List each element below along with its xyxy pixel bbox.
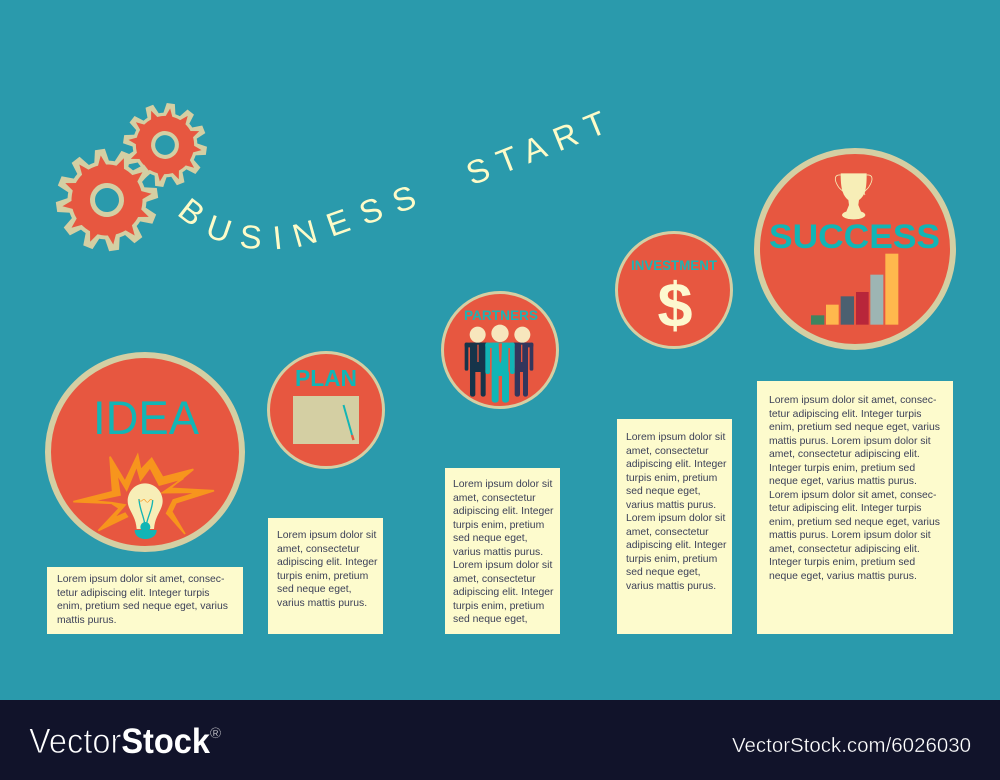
text block: success: tetur adipiscing elit. Integer turpis [769,503,921,514]
heading: partners: PARTNERS [464,307,538,323]
text block: success: amet, consectetur adipiscing elit. [769,449,920,460]
text block: investment: varius mattis purus. [626,500,716,510]
text block: partners: sed neque eget, [453,533,528,544]
title: business start: BUSINESS START [178,110,601,250]
text block: success: neque eget, varius mattis purus. [769,570,917,582]
text block: partners: Lorem ipsum dolor sit [453,479,552,490]
text block: investment [617,419,732,634]
text block: success: Integer turpis enim, pretium sed [769,557,915,568]
footer image id: VectorStock.com/6026030 [732,735,971,757]
text block: investment: adipiscing elit. Integer [626,459,727,470]
footer bar [0,700,1000,780]
text block: plan: varius mattis purus. [277,598,367,608]
text block: investment: amet, consectetur [626,446,709,456]
text block: partners: Lorem ipsum dolor sit [453,560,552,571]
heading: plan: PLAN [295,365,357,391]
icon: small gear [118,98,212,192]
text block: plan: adipiscing elit. Integer [277,557,378,568]
text block: investment: sed neque eget, [626,567,701,578]
panel: partners circle [442,292,558,408]
text block: success: amet, consectetur adipiscing elit. [769,544,920,554]
text block: plan: turpis enim, pretium [277,570,368,582]
text block: partners: varius mattis purus. [453,546,543,558]
panel: investment circle [616,232,732,348]
text block: success [757,381,953,634]
text block: partners: adipiscing elit. Integer [453,506,554,517]
footer logo: VectorStock [29,722,210,761]
text block: success: Lorem ipsum dolor sit amet, consec- [769,395,936,406]
text block: partners: turpis enim, pretium [453,600,544,612]
text block: plan [268,518,383,634]
text block: partners: amet, consectetur [453,574,536,584]
text block: success: enim, pretium sed neque eget, varius [769,422,940,433]
text block: investment: turpis enim, pretium [626,472,717,484]
text block: plan: Lorem ipsum dolor sit [277,530,376,541]
text block: success: Lorem ipsum dolor sit amet, consec- [769,490,936,500]
footer registered mark: ® [210,725,221,742]
text block: success: Integer turpis enim, pretium sed [769,462,915,474]
text block: investment: Lorem ipsum dolor sit [626,432,725,443]
bar chart [811,254,898,325]
text block: plan: amet, consectetur [277,544,360,554]
text block: idea: mattis purus. [57,614,116,626]
heading: idea: IDEA [93,391,200,444]
panel: plan circle [268,352,384,468]
icon: large gear [49,142,165,258]
heading: success: SUCCESS [769,218,940,256]
text block: idea [47,567,243,634]
text block: partners [445,468,560,634]
icon: burst [73,455,214,534]
text block: investment: Lorem ipsum dolor sit [626,513,725,524]
text block: idea: tetur adipiscing elit. Integer turpis [57,588,209,598]
icon: three business people [465,325,533,403]
panel: idea circle [48,355,242,549]
panel: success circle [757,151,953,347]
icon: pencil [344,405,354,440]
text block: success: mattis purus. Lorem ipsum dolor sit [769,530,931,541]
text block: investment: varius mattis purus. [626,580,716,592]
icon: paper [293,396,359,444]
text block: idea: Lorem ipsum dolor sit amet, consec- [57,574,224,585]
text block: success: neque eget, varius mattis purus. [769,476,917,487]
heading: investment: INVESTMENT [631,257,717,273]
text block: plan: sed neque eget, [277,584,352,595]
icon: dollar sign: $ [657,271,693,341]
text block: partners: sed neque eget, [453,614,528,625]
text block: partners: adipiscing elit. Integer [453,587,554,598]
text block: investment: amet, consectetur [626,526,709,538]
icon: trophy [835,173,872,219]
text block: partners: turpis enim, pretium [453,520,544,530]
icon: light bulb [128,483,163,539]
text block: investment: turpis enim, pretium [626,554,717,564]
text block: success: tetur adipiscing elit. Integer turpis [769,408,921,420]
text block: investment: adipiscing elit. Integer [626,540,727,551]
text block: partners: amet, consectetur [453,492,536,504]
text block: idea: enim, pretium sed neque eget, varius [57,601,228,612]
text block: success: mattis purus. Lorem ipsum dolor sit [769,436,931,446]
text block: success: enim, pretium sed neque eget, varius [769,516,940,528]
text block: investment: sed neque eget, [626,486,701,497]
